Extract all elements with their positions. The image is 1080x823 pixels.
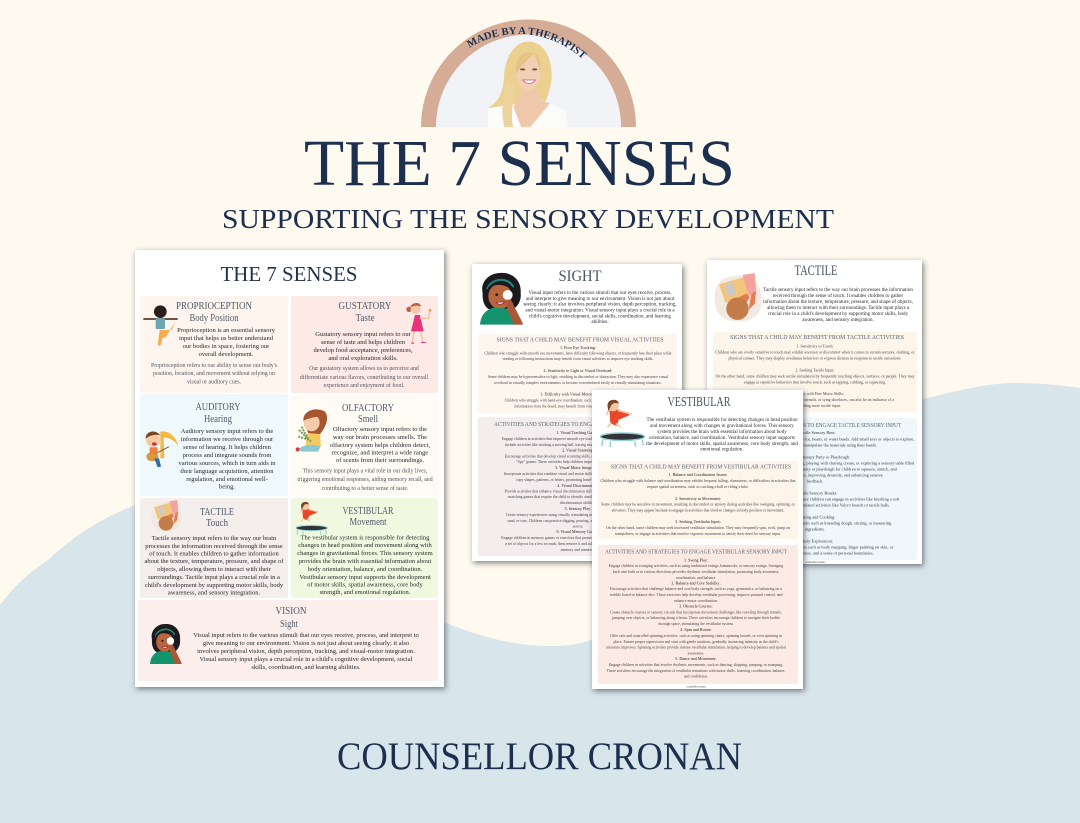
activities list: across. (573, 524, 583, 528)
signs list: overload in visually complex environments or become overwhelmed easily in visually stimulating situations. (494, 381, 662, 385)
lead text: develop food acceptance, preferences, (313, 347, 413, 354)
icon: girl with ice cream (406, 303, 431, 344)
body text: various sources, which in turn aids in (179, 460, 276, 467)
activities list: 4. Visual Discrimination: (557, 483, 599, 488)
signs list: Children who are overly sensitive to touch may exhibit aversion or discomfort when it comes to certain textures, clothing, or (715, 350, 915, 356)
panel: gustatory (291, 296, 438, 393)
secondary text: experience and enjoyment of food. (324, 382, 405, 389)
activities list: mold, strengthening hand muscles, improving dexterity, and enhancing sensory (747, 472, 884, 478)
activities list: 3. Obstacle Courses: (679, 604, 713, 608)
lead text: Gustatory sensory input refers to our (315, 331, 412, 338)
intro text: and visual-motor integration. Visual sensory input plays a crucial role in a (525, 308, 675, 314)
activities list: self-regulation, body awareness, and a sense of personal boundaries. (756, 550, 874, 556)
body text: body orientation, balance, and coordination. (308, 566, 423, 573)
activities list: back and forth or in various directions provides rhythmic vestibular stimulation, promoting body awareness, (613, 570, 779, 575)
activities list: jumping over objects, or balancing along a beam. These activities encourage children to navigate their bodies (611, 616, 781, 621)
body text: information we receive through our (181, 436, 274, 443)
panel: activities (478, 417, 677, 556)
secondary text: differentiate various flavors, contributing to our overall (300, 374, 428, 381)
signs list: 2. Sensitivity to Light or Visual Overload: (544, 368, 612, 373)
secondary text: This sensory input plays a vital role in our daily lives, (303, 468, 428, 474)
signs list: On the other hand, some children may seek tactile stimulation by frequently touching objects, surfaces, or people. They may (716, 374, 914, 380)
intro text: The vestibular system is responsible for detecting changes in head position (646, 416, 798, 423)
page title: TACTILE (794, 263, 838, 279)
subtitle: SUPPORTING THE SENSORY DEVELOPMENT (222, 204, 835, 234)
signs list: Children who struggle with smooth eye movements, have difficulty following objects, or frequently lose their place while (484, 352, 672, 356)
footer handle: counsellorcronan (686, 686, 706, 688)
subheading: Sight (280, 619, 298, 630)
signs list: 3. Difficulty with Fine Motor Skills: (786, 391, 844, 396)
activities list: Involve children in messy hands-on tasks such as kneading dough, stirring, or measuring (739, 520, 892, 526)
icon: girl covering one eye (150, 624, 182, 664)
icon: boy with guitar and music note (146, 431, 178, 467)
panel: vestibular (291, 498, 438, 598)
activities list: 2. Visual Scanning: (562, 448, 594, 452)
signs list: Some children may be hypersensitive to light, resulting in discomfort or distraction. They may also experience visual (488, 375, 668, 380)
body text: Visual sensory input plays a crucial role in a child's cognitive development, social (200, 656, 413, 663)
icon: girl on trampoline (600, 400, 645, 447)
signs list: 2. Sensitivity to Movement: (675, 496, 721, 501)
signs list: physical contact. They may display avoidance behaviors or express distress in response to tactile sensations. (728, 356, 902, 360)
icon: girl on trampoline (296, 502, 327, 535)
body text: processes the information received through the sense (145, 543, 283, 550)
intro text: allowing them to interact with their surroundings. Tactile input plays a (767, 305, 910, 311)
heading: PROPRIOCEPTION (176, 301, 252, 312)
page: vestibular (592, 390, 803, 689)
lead text: and oral exploration skills. (328, 355, 398, 362)
secondary text: triggering emotional responses, aiding memory recall, and (297, 477, 433, 483)
icon: child with sensory book (151, 500, 182, 532)
activities list: Engage children in activities that involve rhythmic movements, such as dancing, skipping, jumping, or stomping. (609, 663, 783, 668)
panel heading: SIGNS THAT A CHILD MAY BENEFIT FROM TACTILE ACTIVITIES (730, 334, 904, 341)
activities list: feedback. (807, 478, 823, 484)
activities list: a set of objects for a few seconds, then remove it and ask them to recall what they saw to build (505, 542, 651, 547)
body text: skills, coordination, and learning abilities. (251, 664, 361, 671)
heading: VISION (276, 606, 306, 617)
icon: girl with flowers (296, 409, 327, 452)
activities list: 6. Visual Memory Games: (556, 529, 600, 534)
activities list: and confidence. (684, 674, 708, 678)
activities list: Encourage activities that challenge balance and core body strength, such as yoga, gymnastics, or balancing on a (610, 587, 782, 592)
arch caption: MADE BY A THERAPIST (466, 27, 588, 58)
panel: vision (138, 600, 438, 681)
signs list: Difficulty with tasks like buttoning, using utensils, or tying shoelaces, can also be an indicator of a (736, 397, 894, 403)
activities list: Create obstacle courses or sensory circuits that incorporate movement challenges like crawling through tunnels, (610, 610, 782, 616)
activities list: copy shapes, patterns, or letters, promoting hand-eye coordination and precision. (516, 478, 640, 483)
signs list: reading or following instructions may benefit from visual activities to improve eye tracking skills. (503, 357, 653, 361)
body text: sense of hearing. It helps children (183, 444, 272, 451)
activities list: Encourage activities that develop visual scanning skills, such as searching for hidden objects or (505, 454, 652, 460)
lead text: overall development. (199, 351, 254, 358)
secondary text: position, location, and movement without relying on (153, 371, 275, 377)
lead text: recognize, and interpret a wide range (332, 450, 428, 456)
intro text: and interpret to give meaning to our environment. Vision is not just about (526, 296, 675, 302)
page: tactile (707, 260, 922, 564)
body text: process and integrate sounds from (183, 452, 271, 459)
body text: give meaning to our environment. Vision is not just about seeing clearly; it also (203, 640, 409, 647)
body text: their language acquisition, attention (180, 468, 274, 475)
heading: VESTIBULAR (342, 506, 394, 517)
activities list: brush on their skin, or using texture-related activities like Velcro boards or tactile balls. (740, 502, 890, 508)
activities list: Engage children in activities that improve smooth eye tracking, such as following a target. This can (502, 437, 654, 442)
poster title: THE 7 SENSES (220, 262, 358, 286)
body text: changes in head position and movement along with (298, 542, 432, 549)
activities list: matching games that require the child to identify similarities and differences in their visual (508, 495, 648, 499)
icon: child with sensory book (715, 273, 761, 321)
activities list: Incorporate activities that combine visual and motor skills, such as drawing or asking children to (504, 472, 652, 477)
subheading: Taste (356, 313, 375, 324)
subheading: Movement (350, 517, 387, 528)
signs list: require spatial awareness, such as catching a ball or riding a bike. (647, 485, 749, 490)
body text: awareness, and sensory integration. (168, 590, 260, 596)
body text: of touch. It enables children to gather information (149, 550, 280, 558)
activities list: wobble board or balance disc. These exercises help develop vestibular processing, improve postural control, and (610, 593, 782, 598)
panel: proprioception (140, 296, 288, 393)
intro text: Visual input refers to the various stimuli that our eyes receive, process, (528, 289, 672, 296)
activities list: Provide activities that enhance visual discrimination skills, such as sorting by color or shape, or (505, 490, 652, 494)
activities list: through space, stimulating the vestibular system. (658, 622, 734, 627)
activities list: coordination, and balance. (676, 576, 716, 581)
body text: Tactile sensory input refers to the way our brain (152, 535, 277, 542)
panel: signs (598, 461, 798, 539)
activities list: sand, or toys. Children can practice digging, pouring, and searching for hidden items placed (507, 519, 649, 524)
portrait photo (436, 34, 621, 127)
panel: tactile (140, 498, 288, 598)
activities list: 1. Visual Tracking Games: (556, 430, 600, 435)
activities list: Offer sensory-rich activities such as finger painting, playing with shaving cream, or exploring a sensory table filled (716, 460, 915, 466)
activities list: allowing children to feel and manipulate the materials using their hands. (753, 442, 877, 448)
activities list: Incorporate breaks throughout the day, where children can engage in activities like brushing a soft (731, 496, 900, 502)
activities list: 2. Balance and Core Stability: (671, 580, 721, 586)
activities list: Create sensory bins filled with materials like sand, rice, beans, or water beads. Add small toys or objects to explore, (716, 436, 914, 442)
signs list: trampolines, or engage in activities that involve vigorous movement to satisfy their need for sensory input. (615, 532, 781, 537)
signs list: Children who struggle with hand-eye coordination, such as difficulty catching a ball or copying (505, 398, 651, 404)
lead text: way our brain processes smells. The (333, 434, 427, 441)
activities list: include activities like tracking a moving ball, tracing mazes or paths with their eyes or a finger. (505, 443, 651, 448)
panel heading: SIGNS THAT A CHILD MAY BENEFIT FROM VESTIBULAR ACTIVITIES (611, 464, 791, 470)
activities list: 5. Dance and Movement: (675, 656, 717, 661)
signs list: 3. Seeking Vestibular Input: (675, 519, 721, 524)
body text: of motor skills, spatial awareness, core body (307, 582, 424, 588)
heading: GUSTATORY (338, 301, 392, 312)
activities list: 3. Tactile Sensory Breaks: (793, 490, 837, 496)
activities list: 5. Body Exploration: (797, 538, 833, 544)
lead text: sense of taste and helps children (321, 339, 406, 346)
panel heading: ACTIVITIES AND STRATEGIES TO ENGAGE VISUAL SENSORY INPUT (494, 421, 666, 428)
intro text: received through the sense of touch. It enables children to gather (773, 292, 904, 299)
subheading: Body Position (190, 313, 238, 324)
intro text: abilities. (591, 319, 609, 325)
activities list: Encourage exploration through activities such as body mapping, finger painting on skin, or (737, 544, 894, 550)
body text: being. (219, 484, 235, 490)
poster: the 7 senses overview (135, 250, 444, 687)
icon: balancing child (143, 305, 178, 346)
panel: signs (478, 334, 677, 413)
activities list: Offer safe and controlled spinning activities, such as using spinning chairs, spinning boards, or even spinning in (610, 634, 782, 639)
intro text: emotional regulation. (700, 446, 744, 452)
signs list: 2. Seeking Tactile Input: (795, 368, 835, 372)
heading: OLFACTORY (342, 403, 394, 414)
body text: changes in gravitational forces. This sensory system (297, 550, 433, 557)
intro text: the development of motor skills, spatial awareness, core body strength, and (646, 440, 798, 447)
panel heading: ACTIVITIES AND STRATEGIES TO ENGAGE TACTILE SENSORY INPUT (733, 422, 901, 429)
activities list: 4. Spin and Rotate: (680, 627, 712, 632)
body text: child's development by supporting motor skills, body (145, 582, 284, 589)
heading: TACTILE (200, 507, 234, 518)
secondary text: visual or auditory cues. (187, 380, 242, 386)
body text: provides the brain with essential information about (299, 558, 431, 565)
activities list: tolerance improves. Spinning activities provide intense vestibular stimulation, helping to develop balance and spatial (606, 646, 786, 650)
lead text: of scents from their surroundings. (336, 457, 424, 464)
signs list: 1. Poor Eye Tracking: (560, 345, 596, 350)
background: blue wave (0, 383, 1080, 823)
brand name: COUNSELLOR CRONAN (337, 735, 742, 778)
body text: Visual input refers to the various stimuli that our eyes receive, process, and interpret to (193, 632, 419, 639)
panel heading: ACTIVITIES AND STRATEGIES TO ENGAGE VESTIBULAR SENSORY INPUT (605, 548, 787, 556)
arch ring (421, 20, 636, 127)
activities list: 5. Sensory Play: (565, 506, 591, 511)
activities list: place. Ensure proper supervision and start with gentle rotations, gradually increasing intensity as the child's (613, 640, 779, 645)
secondary text: contributing to a better sense of taste. (322, 485, 409, 492)
signs list: engage in repetitive behaviors that involve touch, such as tapping, rubbing, or squeezing. (744, 380, 886, 386)
body text: objects, allowing them to interact with their (157, 566, 272, 573)
activities list: memory and attention. (561, 548, 595, 552)
body text: involves peripheral vision, depth perception, tracking, and visual-motor integration. (197, 648, 415, 655)
activities list: Create sensory experiences using visually stimulating materials, such as colored rice or water, (506, 513, 650, 518)
activities list: awareness. (688, 652, 704, 656)
activities list: enhance motor coordination. (674, 599, 718, 603)
intro text: child's cognitive development, social skills, coordination, and learning (529, 314, 672, 320)
intro text: awareness, and sensory integration. (802, 317, 874, 323)
heading: AUDITORY (196, 402, 240, 413)
panel: auditory (140, 394, 288, 496)
page: sight (472, 264, 682, 561)
panel: activities (598, 545, 798, 684)
activities list: 2. Textured Therapy Putty or Playdough: (780, 454, 850, 460)
signs list: 1. Sensitivity to Touch: (796, 344, 834, 348)
body text: surroundings. Tactile input plays a crucial role in a (148, 574, 280, 581)
intro text: information about the texture, temperature, pressure, and shape of objects, (763, 298, 913, 305)
activities list: 1. Swing Play: (684, 558, 708, 562)
subheading: Hearing (204, 414, 232, 425)
body text: Auditory sensory input refers to the (181, 428, 273, 435)
lead text: Olfactory sensory input refers to the (333, 426, 427, 433)
lead text: olfactory system helps children detect, (330, 442, 430, 449)
panel: activities (713, 418, 917, 560)
activities list: 1. Tactile Sensory Bins: (795, 430, 835, 435)
activities list: These activities encourage the integration of vestibular sensations with motor skills, fostering coordination, balance, (607, 669, 785, 674)
panel heading: SIGNS THAT A CHILD MAY BENEFIT FROM VISUAL ACTIVITIES (496, 336, 664, 344)
activities list: "Spy" games. These activities help children improve their ability to locate items. (516, 460, 640, 464)
signs list: child needing more tactile input. (789, 403, 841, 408)
panel: signs (713, 332, 917, 412)
activities list: 4. Baking and Cooking: (794, 514, 836, 520)
lead text: our bodies in space, fostering our (183, 343, 270, 350)
body text: strength, and emotional regulation. (320, 589, 411, 596)
panel: olfactory (291, 395, 438, 496)
signs list: elevators. They may appear hesitant to engage in activities that involve changes in body position or movement. (612, 508, 784, 512)
body text: The vestibular system is responsible for detecting (301, 534, 430, 542)
activities list: ingredients. (805, 526, 825, 532)
intro text: Tactile sensory input refers to the way our brain processes the information (763, 286, 913, 293)
therapist arch badge (421, 20, 636, 127)
activities list: discrimination abilities. (560, 501, 596, 505)
signs list: Some children may be sensitive to movement, resulting in discomfort or anxiety during activities like swinging, spinning, or (601, 502, 796, 508)
activities list: 3. Visual Motor Integration: (555, 465, 601, 470)
secondary text: Proprioception refers to our ability to sense our body's (151, 362, 278, 369)
subheading: Touch (206, 518, 228, 529)
footer handle: counsellorcronan (805, 561, 825, 564)
subheading: Smell (358, 414, 378, 425)
signs list: information from the board, may benefit from visual activities to build these skills. (514, 404, 642, 410)
signs list: 3. Difficulty with Visual-Motor Coordination: (540, 392, 616, 396)
page title: VESTIBULAR (668, 395, 731, 410)
activities list: with different textures. Provide therapy putty or playdough for children to squeeze, stretch, and (733, 466, 898, 472)
intro text: and movement along with changes in gravitational forces. This sensory (650, 422, 794, 429)
activities list: Engage children in swinging activities, such as using traditional swings, hammocks, or sensory swings. Swinging (609, 564, 783, 569)
intro text: crucial role in a child's development by supporting motor skills, body (768, 311, 909, 317)
lead text: input that helps us better understand (179, 335, 274, 342)
signs list: On the other hand, some children may seek increased vestibular stimulation. They may frequently spin, twirl, jump on (606, 526, 790, 531)
body text: Vestibular sensory input supports the development (299, 574, 431, 581)
main title: THE 7 SENSES (304, 127, 735, 200)
signs list: Children who struggle with balance and coordination may exhibit frequent falling, clumsiness, or difficulties in activities that (600, 479, 796, 484)
lead text: Proprioception is an essential sensory (177, 327, 276, 334)
activities list: Engage children in memory games or exercises that promote visual memory skills, such as showing (501, 536, 655, 541)
signs list: 1. Balance and Coordination Issues: (668, 472, 728, 477)
intro text: orientation, balance, and coordination. Vestibular sensory input supports (649, 435, 795, 441)
icon: girl covering one eye (480, 273, 523, 325)
body text: about the texture, temperature, pressure, and shape of (145, 558, 284, 565)
intro text: system provides the brain with essential information about body (657, 428, 787, 435)
intro text: seeing clearly; it also involves peripheral vision, depth perception, tracking, (523, 302, 677, 308)
page title: SIGHT (558, 268, 602, 285)
body text: regulation, and emotional well- (186, 476, 268, 483)
secondary text: Our gustatory system allows us to perceive and (309, 366, 419, 372)
